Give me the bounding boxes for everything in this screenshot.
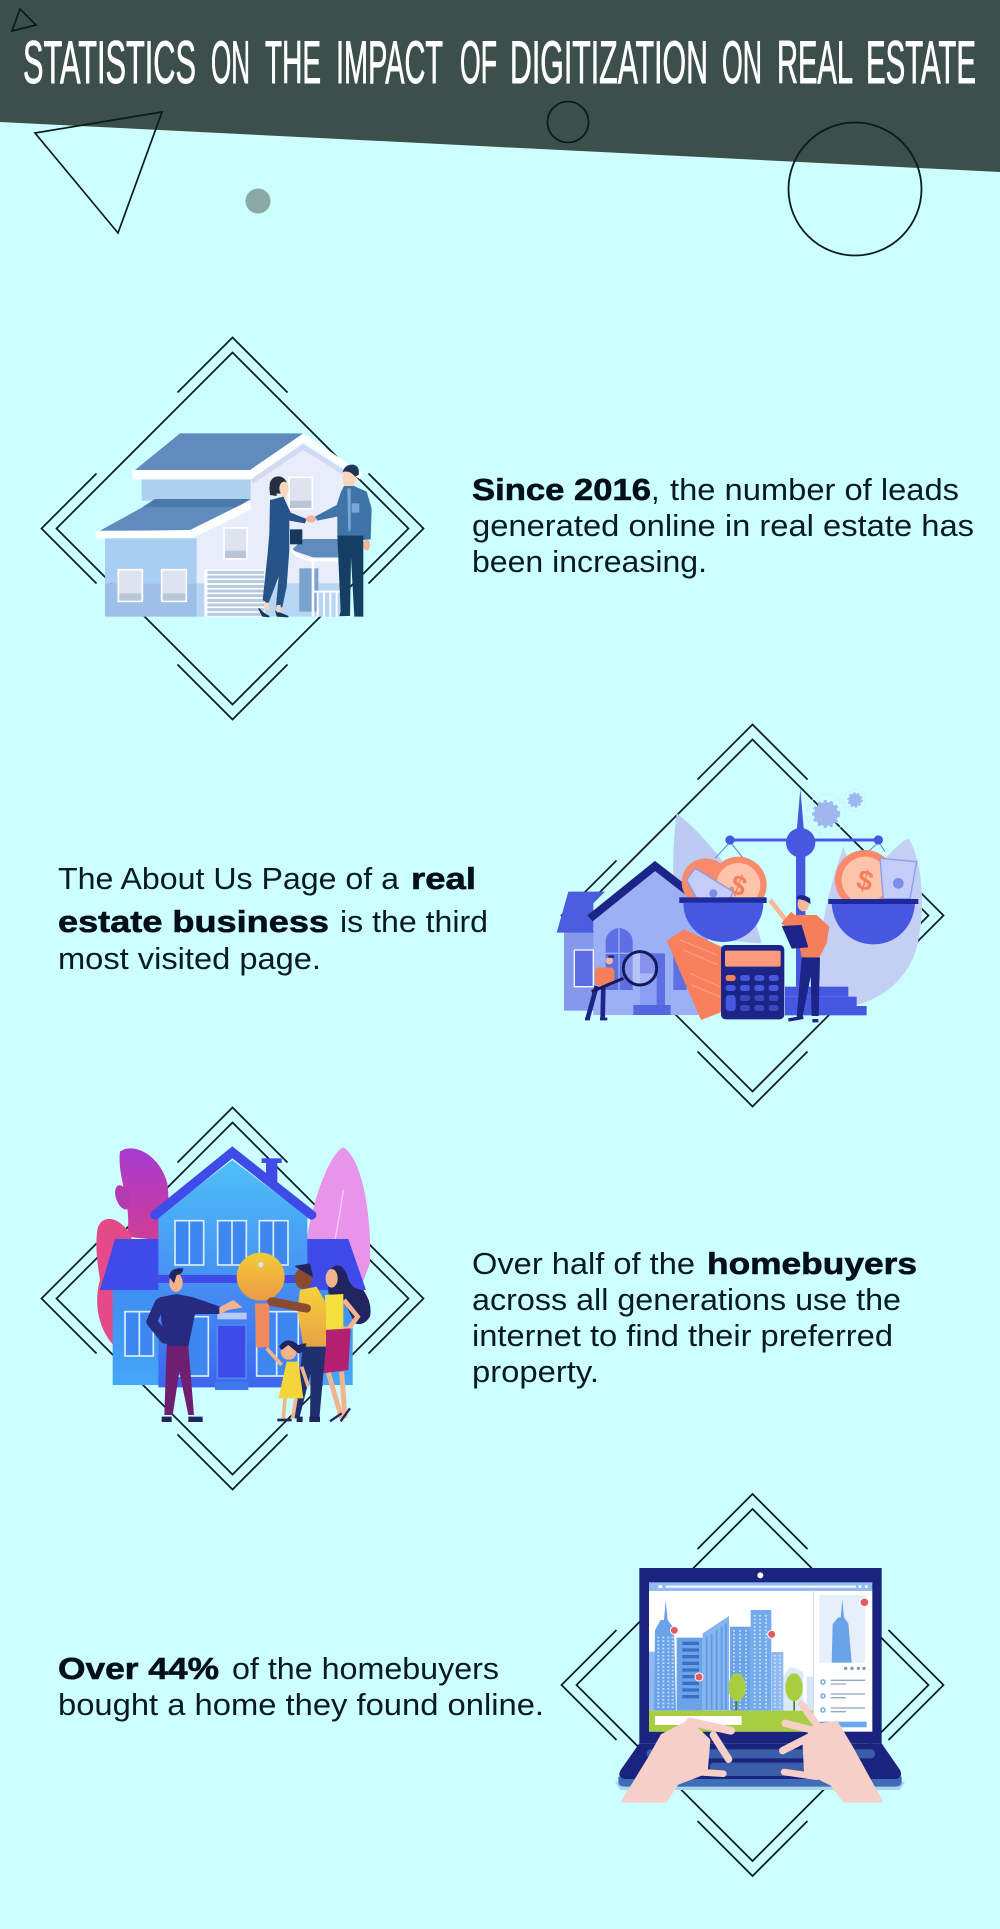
left pan coins xyxy=(682,857,767,913)
text block 1: Since 2016 xyxy=(472,472,651,507)
text block 3: Over half of the xyxy=(472,1246,695,1281)
windows xyxy=(118,477,312,601)
scale xyxy=(715,788,885,987)
text block 2: most visited page. xyxy=(58,941,321,976)
title: IMPACT xyxy=(336,29,443,96)
porch xyxy=(292,539,338,557)
laptop base xyxy=(615,1743,905,1790)
trees xyxy=(728,1673,803,1711)
leaves xyxy=(673,813,762,943)
left pan coins: $ xyxy=(726,868,751,903)
text block 3: internet to find their preferred xyxy=(472,1318,893,1353)
text block 1: been increasing. xyxy=(472,544,707,579)
gable shadow xyxy=(251,444,350,483)
text block 1: the number of leads xyxy=(670,472,959,507)
upper roof xyxy=(135,433,303,470)
man xyxy=(306,465,372,617)
house xyxy=(564,932,596,1011)
man with key xyxy=(152,1268,243,1419)
text block 4 xyxy=(58,1651,544,1722)
title: THE xyxy=(265,29,321,96)
woman xyxy=(259,476,307,617)
text block 2 xyxy=(58,861,488,976)
title xyxy=(23,29,976,96)
title: ON xyxy=(211,29,250,96)
text block 2: estate business xyxy=(58,904,329,939)
document xyxy=(667,929,723,1020)
plants xyxy=(96,1147,370,1347)
illustration: laptop with property listing xyxy=(615,1568,905,1802)
sidebar xyxy=(813,1591,867,1732)
calculator xyxy=(721,945,784,1019)
city buildings xyxy=(649,1600,813,1711)
illustration: house and handshake xyxy=(95,433,372,617)
roof fascia xyxy=(132,433,363,479)
left pan xyxy=(679,897,767,942)
large triangle outline xyxy=(35,112,162,233)
text block 4: bought a home they found online. xyxy=(58,1687,544,1722)
small circle outline xyxy=(548,102,588,142)
diamond frame 3 xyxy=(42,1108,424,1490)
lower wall xyxy=(105,538,197,583)
title: DIGITIZATION xyxy=(510,29,708,96)
illustration: family receiving house key xyxy=(96,1147,371,1421)
gears xyxy=(807,789,866,833)
magnifier xyxy=(623,952,657,985)
right pan coin and notes xyxy=(835,850,917,910)
text block 3: homebuyers xyxy=(707,1246,917,1281)
camera xyxy=(757,1572,763,1578)
text block 3: across all generations use the xyxy=(472,1282,901,1317)
text block 4: Over 44% xyxy=(58,1651,219,1686)
small triangle outline xyxy=(12,9,36,31)
laptop lid xyxy=(639,1568,882,1743)
text block 2: The About Us Page of a xyxy=(58,861,400,896)
right pan xyxy=(828,899,918,944)
heart markers xyxy=(670,1598,869,1681)
grey dot xyxy=(246,188,270,214)
title: OF xyxy=(460,29,497,96)
stairs xyxy=(785,987,867,1015)
title: STATISTICS xyxy=(23,29,196,96)
right pan coin and notes: $ xyxy=(853,864,877,898)
text block 2: real xyxy=(411,861,476,896)
garage door xyxy=(204,569,265,617)
title: ON xyxy=(722,29,762,96)
man in yellow shirt xyxy=(272,1263,326,1419)
title: REAL xyxy=(777,29,853,96)
text block 3 xyxy=(472,1246,917,1389)
man with clipboard xyxy=(770,895,829,1021)
lower roof xyxy=(142,499,251,508)
diamond frame 2 xyxy=(562,724,944,1106)
lower fascia xyxy=(95,500,251,538)
large circle outline xyxy=(788,122,922,256)
text block 1 xyxy=(472,472,974,579)
diamond frame 1 xyxy=(42,338,424,720)
text block 1: , xyxy=(651,472,660,507)
upper wing wall xyxy=(142,479,251,501)
text block 3: property. xyxy=(472,1354,599,1389)
text block 1: generated online in real estate has xyxy=(472,508,974,543)
diamond frame 4 xyxy=(562,1494,944,1876)
girl xyxy=(267,1340,308,1420)
left hand xyxy=(622,1721,731,1802)
inspector figure xyxy=(585,957,623,1019)
woman xyxy=(322,1265,371,1421)
house xyxy=(100,1152,366,1390)
grass and search bar xyxy=(649,1711,813,1732)
gable wall xyxy=(197,444,345,617)
text block 4: of the homebuyers xyxy=(232,1651,499,1686)
text block 2: is the third xyxy=(340,904,488,939)
right hand xyxy=(783,1704,882,1802)
key xyxy=(237,1253,285,1347)
illustration: scale, house and calculator xyxy=(557,788,922,1021)
header band xyxy=(0,0,1000,172)
browser window xyxy=(649,1582,872,1732)
